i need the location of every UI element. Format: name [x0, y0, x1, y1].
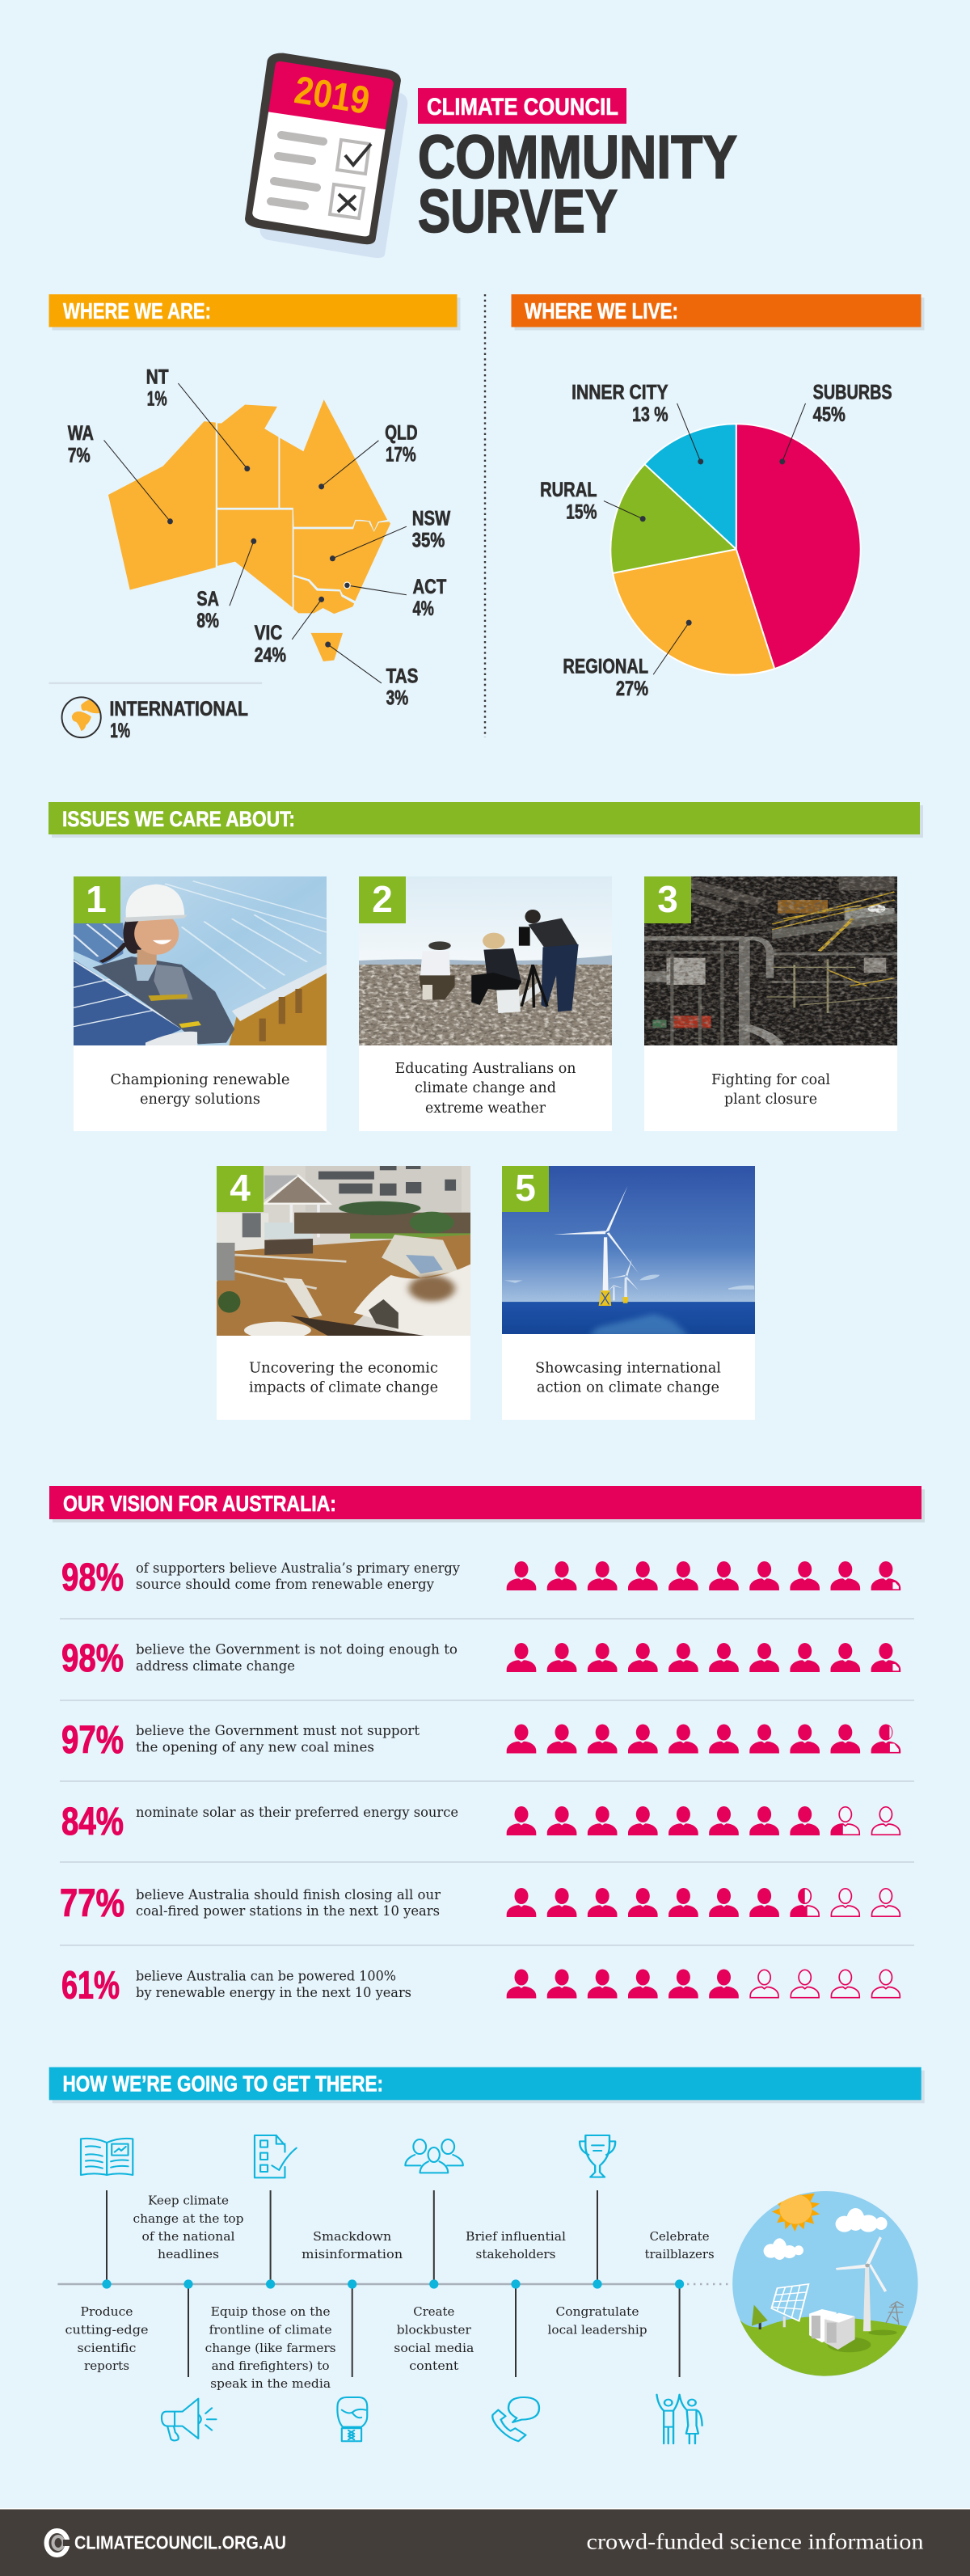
pie labels: 13 %: [632, 404, 668, 426]
timeline text: smackdown: Smackdown: [313, 2229, 392, 2244]
map states: [108, 399, 390, 661]
timeline text: keep climate change: of the national: [142, 2229, 235, 2244]
number badge 3: 3: [657, 878, 678, 920]
heading: issues: ISSUES WE CARE ABOUT:: [62, 807, 295, 831]
timeline text: produce reports: Produce: [81, 2304, 133, 2319]
stat row: 98% government: 98%: [61, 1637, 124, 1680]
label: international: INTERNATIONAL: [109, 699, 248, 720]
photo: worker with solar panels: [74, 876, 327, 1045]
heading: where we live: [511, 294, 925, 330]
icon: Climate Council logo: [47, 2531, 71, 2555]
pie labels: 15%: [566, 501, 597, 524]
card text: action on climate change: [537, 1379, 719, 1396]
map of Australia with state shares: [48, 366, 450, 742]
card text: Fighting for coal: [711, 1072, 830, 1088]
timeline text: congratulate: local leadership: [548, 2322, 647, 2337]
timeline text: social media: [394, 2304, 474, 2373]
heading: where we live: WHERE WE LIVE:: [525, 298, 678, 323]
title block: [245, 53, 737, 258]
card text: Uncovering the economic: [249, 1360, 438, 1376]
map labels: 17%: [386, 444, 416, 467]
icon: survey clipboard: [245, 53, 407, 258]
heading: vision: [49, 1486, 925, 1522]
battery units: [809, 2309, 855, 2350]
stat row: 84% solar: [61, 1801, 900, 1843]
tag: Climate Council: CLIMATE COUNCIL: [427, 94, 618, 120]
map dots: [167, 466, 350, 648]
heading: issues: [48, 802, 923, 838]
label: international: [109, 699, 248, 742]
ground shadows: [828, 2337, 871, 2352]
timeline text: produce reports: reports: [84, 2359, 129, 2373]
pie labels: SUBURBS: [813, 382, 892, 404]
panel: how we're going to get there: [49, 2067, 925, 2443]
number badge 5: 5: [515, 1167, 536, 1209]
timeline text: celebrate: Celebrate: [650, 2229, 710, 2244]
heading: where we are: [48, 294, 461, 330]
heading: Survey: SURVEY: [418, 177, 618, 245]
timeline text: keep climate change: [133, 2193, 244, 2261]
pie labels: 45%: [813, 404, 846, 426]
card text: energy solutions: [140, 1092, 260, 1108]
panel: where we are: [48, 294, 460, 742]
number badge 1: [74, 876, 120, 923]
timeline text: equip the frontline: speak in the media: [210, 2376, 331, 2391]
timeline text: equip the frontline: Equip those on the: [211, 2304, 331, 2319]
map labels: 1%: [147, 388, 167, 410]
map labels: 24%: [255, 644, 286, 667]
person pictogram row: [507, 1806, 900, 1835]
stat row: 97% coal mines: the opening of any new coal mines: [136, 1740, 374, 1755]
map labels: WA: [68, 423, 94, 445]
timeline text: equip the frontline: change (like farmers: [205, 2341, 336, 2355]
timeline text: social media: Create: [413, 2304, 454, 2319]
footer website: CLIMATECOUNCIL.ORG.AU: [74, 2532, 286, 2553]
card text: plant closure: [724, 1092, 817, 1108]
map labels: TAS: [386, 665, 418, 688]
timeline text: social media: social media: [394, 2341, 474, 2355]
heading: how: [49, 2067, 925, 2103]
illustration: renewable landscape: [731, 2190, 918, 2380]
person pictogram row: [507, 1643, 900, 1672]
timeline text: brief stakeholders: [466, 2229, 566, 2261]
stat row: 77% coal-fired power stations: coal-fired power stations in the next 10 years: [136, 1903, 440, 1919]
timeline text: produce reports: cutting-edge: [65, 2322, 149, 2337]
icons: right half of timeline: [492, 2135, 918, 2443]
panel: where we live: [511, 294, 925, 700]
number badge 4: [217, 1166, 264, 1212]
pie labels: INNER CITY: [571, 382, 668, 404]
stat row: 61% 100% renewable: believe Australia can be powered 100%: [136, 1968, 396, 1984]
clouds: [764, 2208, 888, 2260]
card 4: economic impacts: [217, 1166, 470, 1420]
timeline text: equip the frontline: [205, 2304, 336, 2391]
icon: boxing glove: [337, 2397, 367, 2441]
timeline text: keep climate change: change at the top: [133, 2211, 244, 2226]
number badge 3: [644, 876, 691, 923]
stat row: 97% coal mines: [61, 1719, 900, 1762]
card text: climate change and: [415, 1080, 556, 1096]
map labels: 8%: [196, 610, 219, 632]
footer tagline: crowd-funded science information: [587, 2530, 924, 2554]
icon: globe: [62, 697, 102, 737]
stat row: 61% 100% renewable: 61%: [61, 1965, 120, 2007]
card text: [535, 1360, 721, 1396]
stat row: 84% solar: 84%: [61, 1801, 124, 1843]
timeline text: keep climate change: Keep climate: [148, 2193, 229, 2207]
stat row: 97% coal mines: believe the Government must not support: [136, 1723, 420, 1738]
card 1: renewable energy: [74, 876, 327, 1131]
icon: two people high-five: [656, 2395, 702, 2443]
icons: left half of timeline: [81, 2135, 463, 2441]
timeline text: brief stakeholders: stakeholders: [475, 2247, 556, 2261]
card 2: educating Australians: [359, 876, 612, 1131]
map labels: 35%: [412, 530, 445, 552]
heading: how: HOW WE’RE GOING TO GET THERE:: [63, 2071, 383, 2096]
icon: phone and speech bubble: [492, 2397, 539, 2441]
stat row: 84% solar: nominate solar as their preferred energy source: [136, 1805, 458, 1820]
card 3: coal plant closure: [644, 876, 897, 1131]
card text: Showcasing international: [535, 1360, 721, 1376]
map labels: NSW: [412, 508, 450, 530]
photo: film crew in a field: [359, 876, 612, 1045]
timeline: [57, 2190, 732, 2377]
card text: extreme weather: [425, 1100, 546, 1117]
icon: group of people: [405, 2139, 463, 2173]
timeline text: congratulate: [548, 2304, 647, 2337]
pie labels: [540, 382, 892, 700]
card text: [394, 1061, 576, 1117]
stat row: 98% government: believe the Government is not doing enough to: [136, 1641, 458, 1658]
stat row: 98% primary energy: source should come from renewable energy: [136, 1577, 435, 1592]
card text: Championing renewable: [110, 1072, 289, 1088]
number badge 4: 4: [230, 1167, 251, 1209]
timeline text: produce reports: [65, 2304, 149, 2373]
solar panel: [771, 2284, 808, 2327]
pie labels: REGIONAL: [563, 656, 648, 678]
panel: issues we care about: [48, 802, 923, 1420]
number badge 1: 1: [86, 878, 107, 920]
timeline text: equip the frontline: and firefighters) to: [212, 2359, 330, 2373]
map labels: QLD: [385, 422, 418, 445]
timeline text: smackdown: misinformation: [302, 2247, 403, 2261]
map labels: VIC: [255, 623, 282, 644]
stat row: 77% coal-fired power stations: 77%: [60, 1882, 124, 1925]
person pictogram row: [507, 1888, 900, 1917]
map labels: 4%: [413, 598, 434, 620]
photo: coal plant interior: [644, 876, 897, 1045]
timeline text: equip the frontline: frontline of climate: [209, 2322, 332, 2337]
stat row: 98% government: address climate change: [136, 1658, 295, 1674]
pylon: [886, 2302, 904, 2325]
photo: storm-damaged coastline: [217, 1166, 470, 1336]
stat row: 98% government: [61, 1637, 900, 1680]
footer: [0, 2508, 970, 2576]
pie wedges: [610, 424, 861, 675]
sun: [772, 2190, 820, 2232]
map labels: ACT: [413, 576, 446, 598]
timeline text: congratulate: Congratulate: [556, 2304, 639, 2319]
pie leader lines: [604, 403, 805, 674]
heading: where we are: WHERE WE ARE:: [63, 298, 211, 323]
person pictogram row: [507, 1970, 900, 1999]
card 5: international action: [502, 1166, 755, 1420]
number badge 2: [359, 876, 406, 923]
wind turbine: [836, 2236, 887, 2331]
stat row: 61% 100% renewable: by renewable energy in the next 10 years: [136, 1985, 411, 2000]
tree: [752, 2305, 768, 2329]
stat row: 77% coal-fired power stations: [60, 1882, 900, 1925]
card text: [110, 1072, 289, 1108]
timeline text: smackdown: [302, 2229, 403, 2261]
map labels: 3%: [386, 687, 408, 710]
tag: Climate Council: [418, 88, 626, 124]
stat row: 97% coal mines: 97%: [61, 1719, 124, 1762]
timeline text: brief stakeholders: Brief influential: [466, 2229, 566, 2244]
number badge 2: 2: [372, 878, 393, 920]
card text: [711, 1072, 830, 1108]
pie labels: 27%: [616, 678, 648, 700]
icon: checklist: [255, 2135, 297, 2177]
heading: Community: COMMUNITY: [418, 123, 737, 191]
timeline text: celebrate: trailblazers: [645, 2247, 715, 2261]
icon: trophy: [580, 2135, 615, 2177]
panel: our vision for Australia: [49, 1486, 925, 2007]
map labels: NT: [146, 366, 169, 389]
stat row: 61% 100% renewable: [61, 1965, 900, 2007]
number badge 5: [502, 1166, 549, 1212]
stat row: 77% coal-fired power stations: believe Australia should finish closing all our: [136, 1887, 441, 1902]
map labels: SA: [196, 589, 219, 610]
ground: [740, 2317, 907, 2376]
pie dots: [640, 458, 785, 626]
icon: megaphone: [162, 2399, 216, 2440]
stat row: 98% primary energy: [61, 1556, 900, 1599]
card text: Educating Australians on: [394, 1061, 576, 1077]
timeline text: keep climate change: headlines: [158, 2247, 219, 2261]
person pictogram row: [507, 1724, 900, 1753]
map leader lines: [104, 383, 407, 683]
timeline text: produce reports: scientific: [78, 2341, 136, 2355]
heading: vision: OUR VISION FOR AUSTRALIA:: [63, 1491, 336, 1516]
card text: [249, 1360, 438, 1396]
stat row: 98% primary energy: of supporters believe Australia’s primary energy: [136, 1560, 461, 1576]
label: international: 1%: [110, 720, 130, 742]
photo: offshore wind turbines: [502, 1166, 755, 1334]
pie chart: [540, 382, 892, 700]
pie labels: RURAL: [540, 479, 597, 501]
stat row: 98% primary energy: 98%: [61, 1556, 124, 1599]
icon: open book: [81, 2139, 133, 2175]
map labels: 7%: [68, 445, 91, 467]
timeline text: social media: content: [409, 2359, 458, 2373]
icon: survey clipboard: 2019: [292, 69, 373, 123]
person pictogram row: [507, 1561, 900, 1590]
timeline text: social media: blockbuster: [397, 2322, 472, 2337]
card text: impacts of climate change: [249, 1379, 438, 1396]
timeline text: celebrate: [645, 2229, 715, 2261]
map labels: [68, 366, 450, 710]
